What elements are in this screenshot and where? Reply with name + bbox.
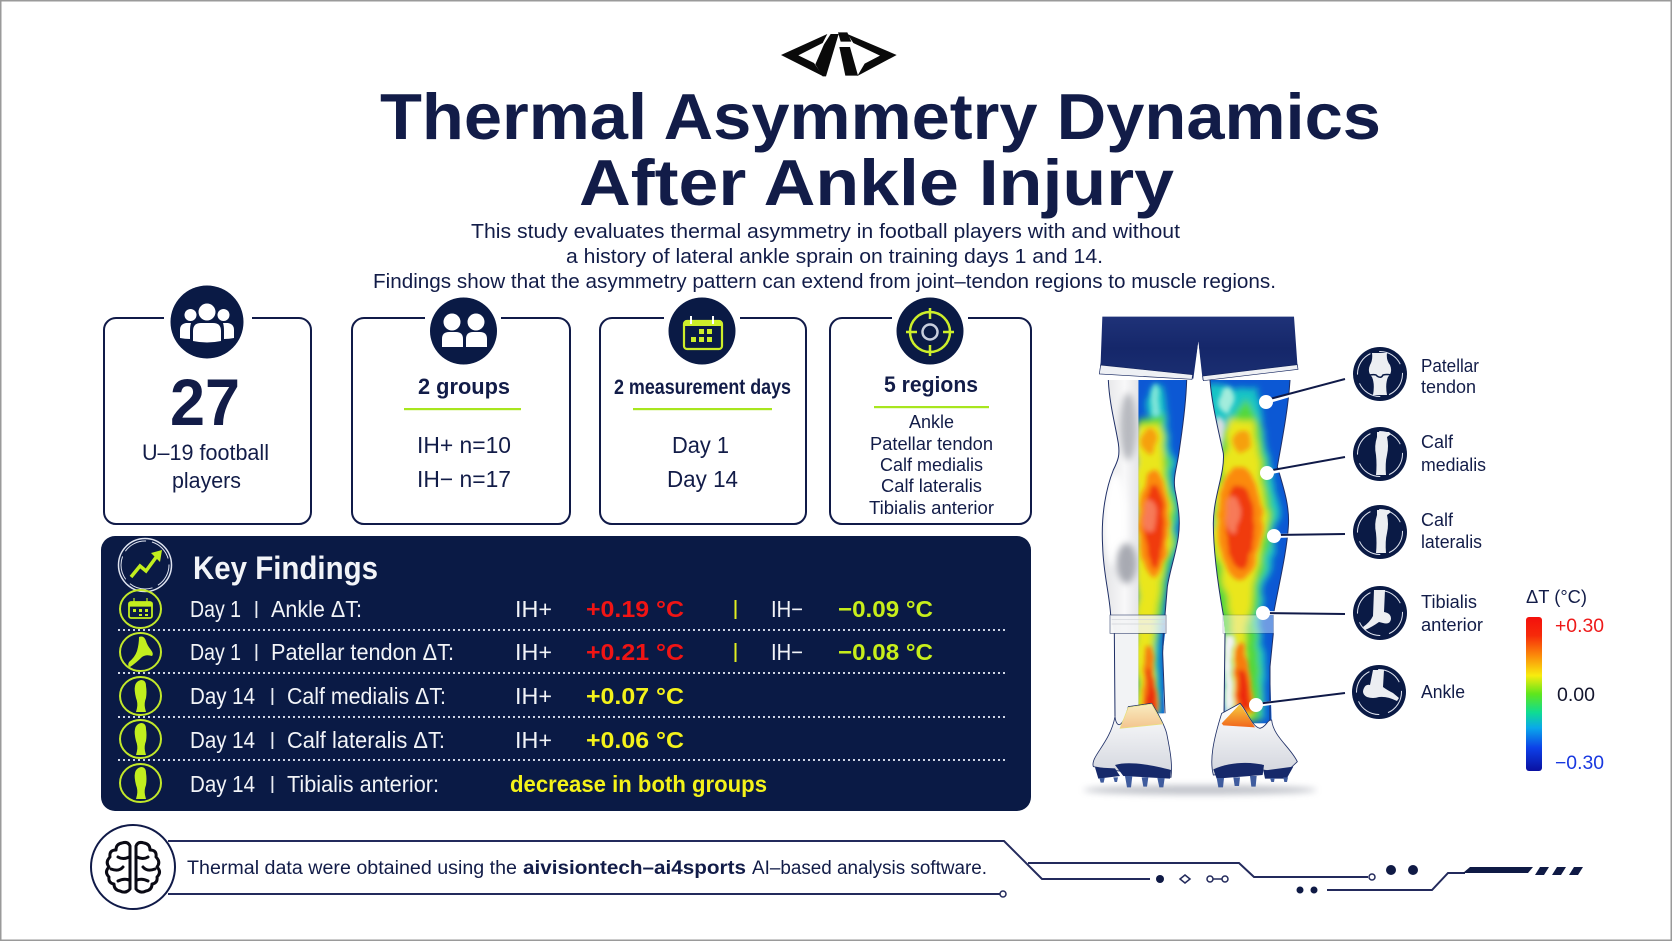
legend: temperature scale: −0.30 [1555, 753, 1604, 774]
days [667, 432, 738, 492]
row: day 1 ankle [120, 590, 933, 628]
row: day 1 patellar tendon: IH+ [515, 639, 552, 665]
title [380, 80, 1381, 219]
row: day 14 calf medialis: Calf medialis ΔT: [287, 683, 446, 709]
row: day 14 calf lateralis: Calf lateralis ΔT: [287, 727, 445, 753]
label: calf lateralis [1421, 510, 1482, 552]
group counts: IH+ n=10 [417, 432, 511, 458]
region list: Tibialis anterior [869, 498, 994, 518]
icon: calendar [668, 298, 736, 364]
row: day 14 calf lateralis: IH+ [515, 727, 552, 753]
row: day 1 patellar tendon: Patellar tendon ΔT: [271, 639, 454, 665]
icon: ankle [1352, 665, 1406, 719]
label: patellar tendon: Patellar [1421, 356, 1479, 376]
label: U-19 football players [142, 440, 269, 493]
label: patellar tendon [1421, 356, 1479, 397]
icon: team [170, 286, 244, 358]
label: calf medialis: Calf [1421, 432, 1454, 452]
subtitle text: Findings show that the asymmetry pattern can extend from joint–tendon regions to muscle regions. [373, 271, 1276, 293]
label: calf medialis [1421, 432, 1486, 475]
row: day 14 tibialis anterior: decrease in both groups [510, 771, 767, 797]
group counts [417, 432, 511, 492]
row: day 1 ankle: Ankle ΔT: [271, 596, 362, 622]
row: day 1 patellar tendon: −0.08 °C [838, 639, 933, 665]
row: day 1 ankle: −0.09 °C [838, 596, 933, 622]
subtitle text: This study evaluates thermal asymmetry in football players with and without [471, 221, 1180, 243]
logo [781, 32, 897, 76]
icon: brain [91, 825, 175, 909]
label: calf lateralis: Calf [1421, 510, 1454, 530]
region list: Patellar tendon [870, 434, 993, 454]
label: ankle: Ankle [1421, 682, 1465, 702]
heading: 5 regions [884, 372, 978, 397]
region list [869, 412, 994, 518]
row: day 14 calf medialis: +0.07 °C [586, 683, 684, 709]
text: software note: aivisiontech–ai4sports [523, 858, 746, 879]
label: tibialis anterior [1421, 592, 1483, 635]
row: day 14 calf medialis [120, 677, 684, 715]
icon: two people [430, 298, 497, 364]
text: software note [187, 858, 987, 879]
label: patellar tendon: tendon [1421, 377, 1476, 397]
row: day 14 tibialis anterior: Tibialis anterior: [287, 771, 439, 797]
panel: key findings [101, 536, 1031, 811]
heading: key findings: Key Findings [193, 550, 378, 586]
footer: software note [91, 825, 1583, 909]
left boot [1093, 703, 1172, 787]
label: U-19 football players: U–19 football [142, 440, 269, 465]
region list: Calf medialis [880, 455, 983, 475]
shorts [1099, 317, 1298, 381]
title: Thermal Asymmetry Dynamics [380, 80, 1381, 153]
label: tibialis anterior: Tibialis [1421, 592, 1477, 612]
row: day 14 calf lateralis [120, 720, 684, 758]
label: calf lateralis: lateralis [1421, 532, 1482, 552]
days: Day 1 [672, 432, 729, 458]
icon: calf medialis [1353, 427, 1407, 481]
legend: temperature scale: 0.00 [1557, 685, 1595, 706]
legend: temperature scale [1526, 587, 1604, 774]
group counts: IH− n=17 [417, 466, 511, 492]
region list: Calf lateralis [881, 476, 982, 496]
heading: 2 measurement days [614, 376, 791, 399]
label: U-19 football players: players [172, 468, 241, 493]
row: day 1 patellar tendon: +0.21 °C [586, 639, 684, 665]
legend: temperature scale: +0.30 [1555, 616, 1604, 637]
stat: 27: 27 [170, 365, 240, 439]
days: Day 14 [667, 466, 738, 492]
row: day 1 ankle: IH− [771, 596, 803, 622]
row: day 1 ankle: IH+ [515, 596, 552, 622]
text: software note: AI–based analysis software. [752, 858, 987, 879]
title: After Ankle Injury [579, 146, 1174, 219]
right leg [1207, 377, 1293, 727]
row: day 1 ankle: +0.19 °C [586, 596, 684, 622]
left leg [1102, 380, 1188, 724]
row: day 14 tibialis anterior: Day 14 [190, 771, 255, 797]
row: day 1 ankle: Day 1 [190, 596, 241, 622]
legend: temperature scale: ΔT (°C) [1526, 587, 1587, 607]
row: day 14 calf lateralis: Day 14 [190, 727, 255, 753]
text: software note: Thermal data were obtained using the [187, 858, 517, 879]
subtitle text: a history of lateral ankle sprain on training days 1 and 14. [566, 246, 1103, 268]
icon: trend arrow [118, 538, 172, 592]
panel: 27 players [104, 286, 311, 524]
panel: 2 groups [352, 298, 570, 524]
row: day 14 tibialis anterior [120, 764, 767, 802]
panel: 5 regions [830, 298, 1031, 524]
illustration: legs with thermal overlay [1083, 317, 1317, 795]
row: day 14 calf medialis: IH+ [515, 683, 552, 709]
right boot [1212, 703, 1297, 787]
row: day 14 calf medialis: Day 14 [190, 683, 255, 709]
row: day 1 patellar tendon: IH− [771, 639, 803, 665]
panel: 2 measurement days [600, 298, 806, 524]
row: day 1 patellar tendon [120, 633, 933, 671]
region list: Ankle [909, 412, 954, 432]
label: tibialis anterior: anterior [1421, 615, 1483, 635]
row: day 14 calf lateralis: +0.06 °C [586, 727, 684, 753]
icon: patellar tendon [1353, 347, 1407, 401]
icon: target [896, 298, 964, 364]
callout lines and markers [1249, 379, 1345, 712]
icon: tibialis anterior [1353, 586, 1407, 640]
subtitle text [373, 221, 1276, 293]
heading: 2 groups [418, 374, 510, 399]
row: day 1 patellar tendon: Day 1 [190, 639, 241, 665]
label: calf medialis: medialis [1421, 455, 1486, 475]
icon: calf lateralis [1353, 505, 1407, 559]
